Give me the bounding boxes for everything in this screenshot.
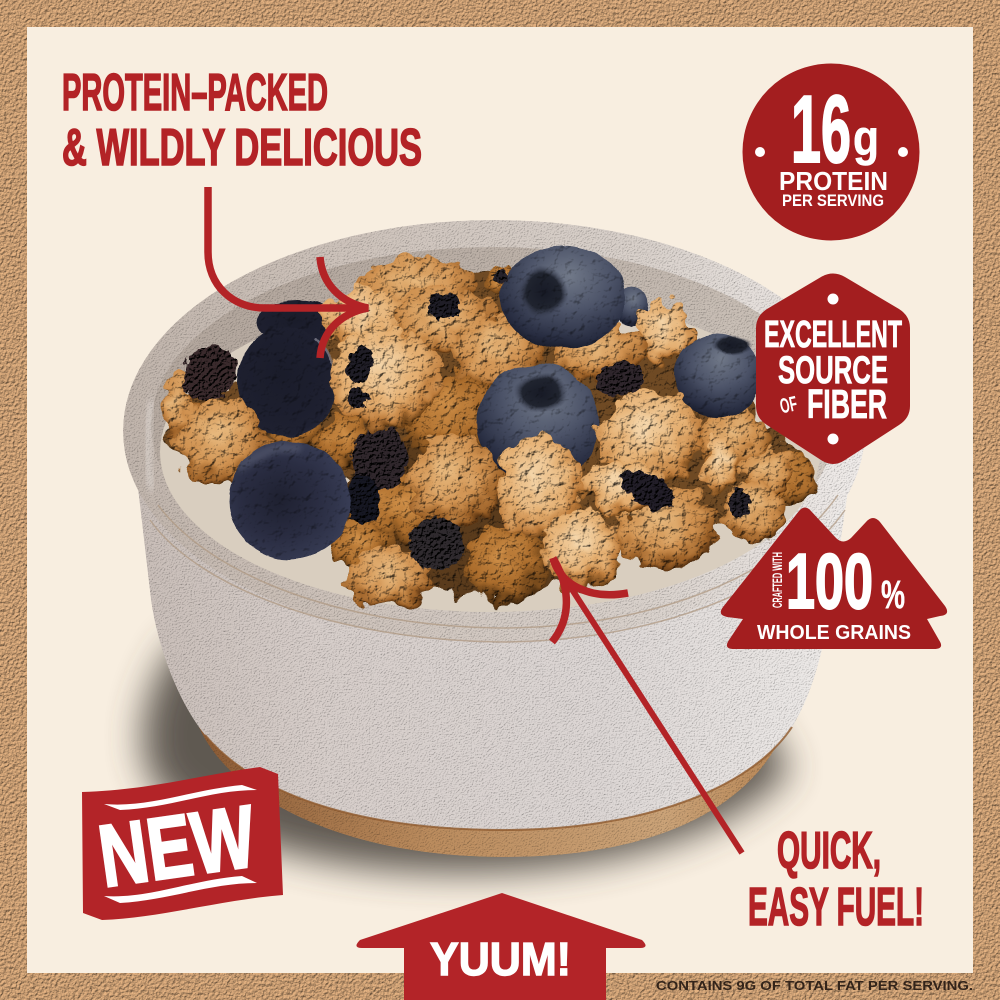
badge: excellent source of fiber: OF [778,392,799,418]
badge: 16g protein: PROTEIN [779,166,888,196]
badge: 100% whole grains: % [881,573,905,617]
bowl with granola and blueberries [123,220,865,857]
blueberry large top [501,245,625,349]
arrow to granola [208,187,368,358]
blueberry centre [477,364,599,482]
badge: yuum arrow: YUUM! [430,933,571,985]
badge: excellent source of fiber [756,274,910,464]
dark raisins left [175,336,408,526]
badge: 100% whole grains: 100 [786,537,873,625]
rim front grooves [150,495,845,642]
badge: 16g protein: 16 [791,76,851,183]
badge: 100% whole grains [721,508,947,649]
heading [62,64,422,177]
badge: excellent source of fiber: EXCELLENT [764,314,902,356]
badge: 16g protein: PER SERVING [782,192,884,210]
heading: & WILDLY DELICIOUS [62,119,422,177]
badge: yuum arrow [356,893,646,1000]
badge: new flag: NEW [93,786,261,906]
bowl body [137,470,851,830]
badge: 16g protein [742,64,920,240]
bowl shadow [142,640,790,873]
front granola clusters [176,328,787,609]
heading: PROTEIN–PACKED [62,64,328,122]
back blueberries [257,286,649,344]
blueberry front left [229,441,351,559]
badge: excellent source of fiber: FIBER [807,381,887,427]
rim highlight [148,400,152,490]
badge: excellent source of fiber: SOURCE [778,349,888,392]
back granola clusters [160,257,816,569]
base top edge [205,727,792,830]
blueberry right [674,334,760,418]
badge: 100% whole grains: CRAFTED WITH [769,552,785,608]
badge: 100% whole grains: WHOLE GRAINS [757,621,911,644]
footnote: CONTAINS 9G OF TOTAL FAT PER SERVING. [656,978,973,993]
dark raisins front [343,270,751,570]
bowl rim outer [123,220,865,642]
bowl terracotta base [198,725,782,857]
badge: 16g protein: g [853,110,879,166]
yogurt [160,292,820,612]
granola underlay [165,270,807,595]
arrow to cluster [552,558,742,853]
callout: quick easy fuel: QUICK, [777,822,881,880]
callout: quick easy fuel [748,822,924,937]
blueberry dark left [237,327,337,437]
bowl inner wall [151,247,835,603]
